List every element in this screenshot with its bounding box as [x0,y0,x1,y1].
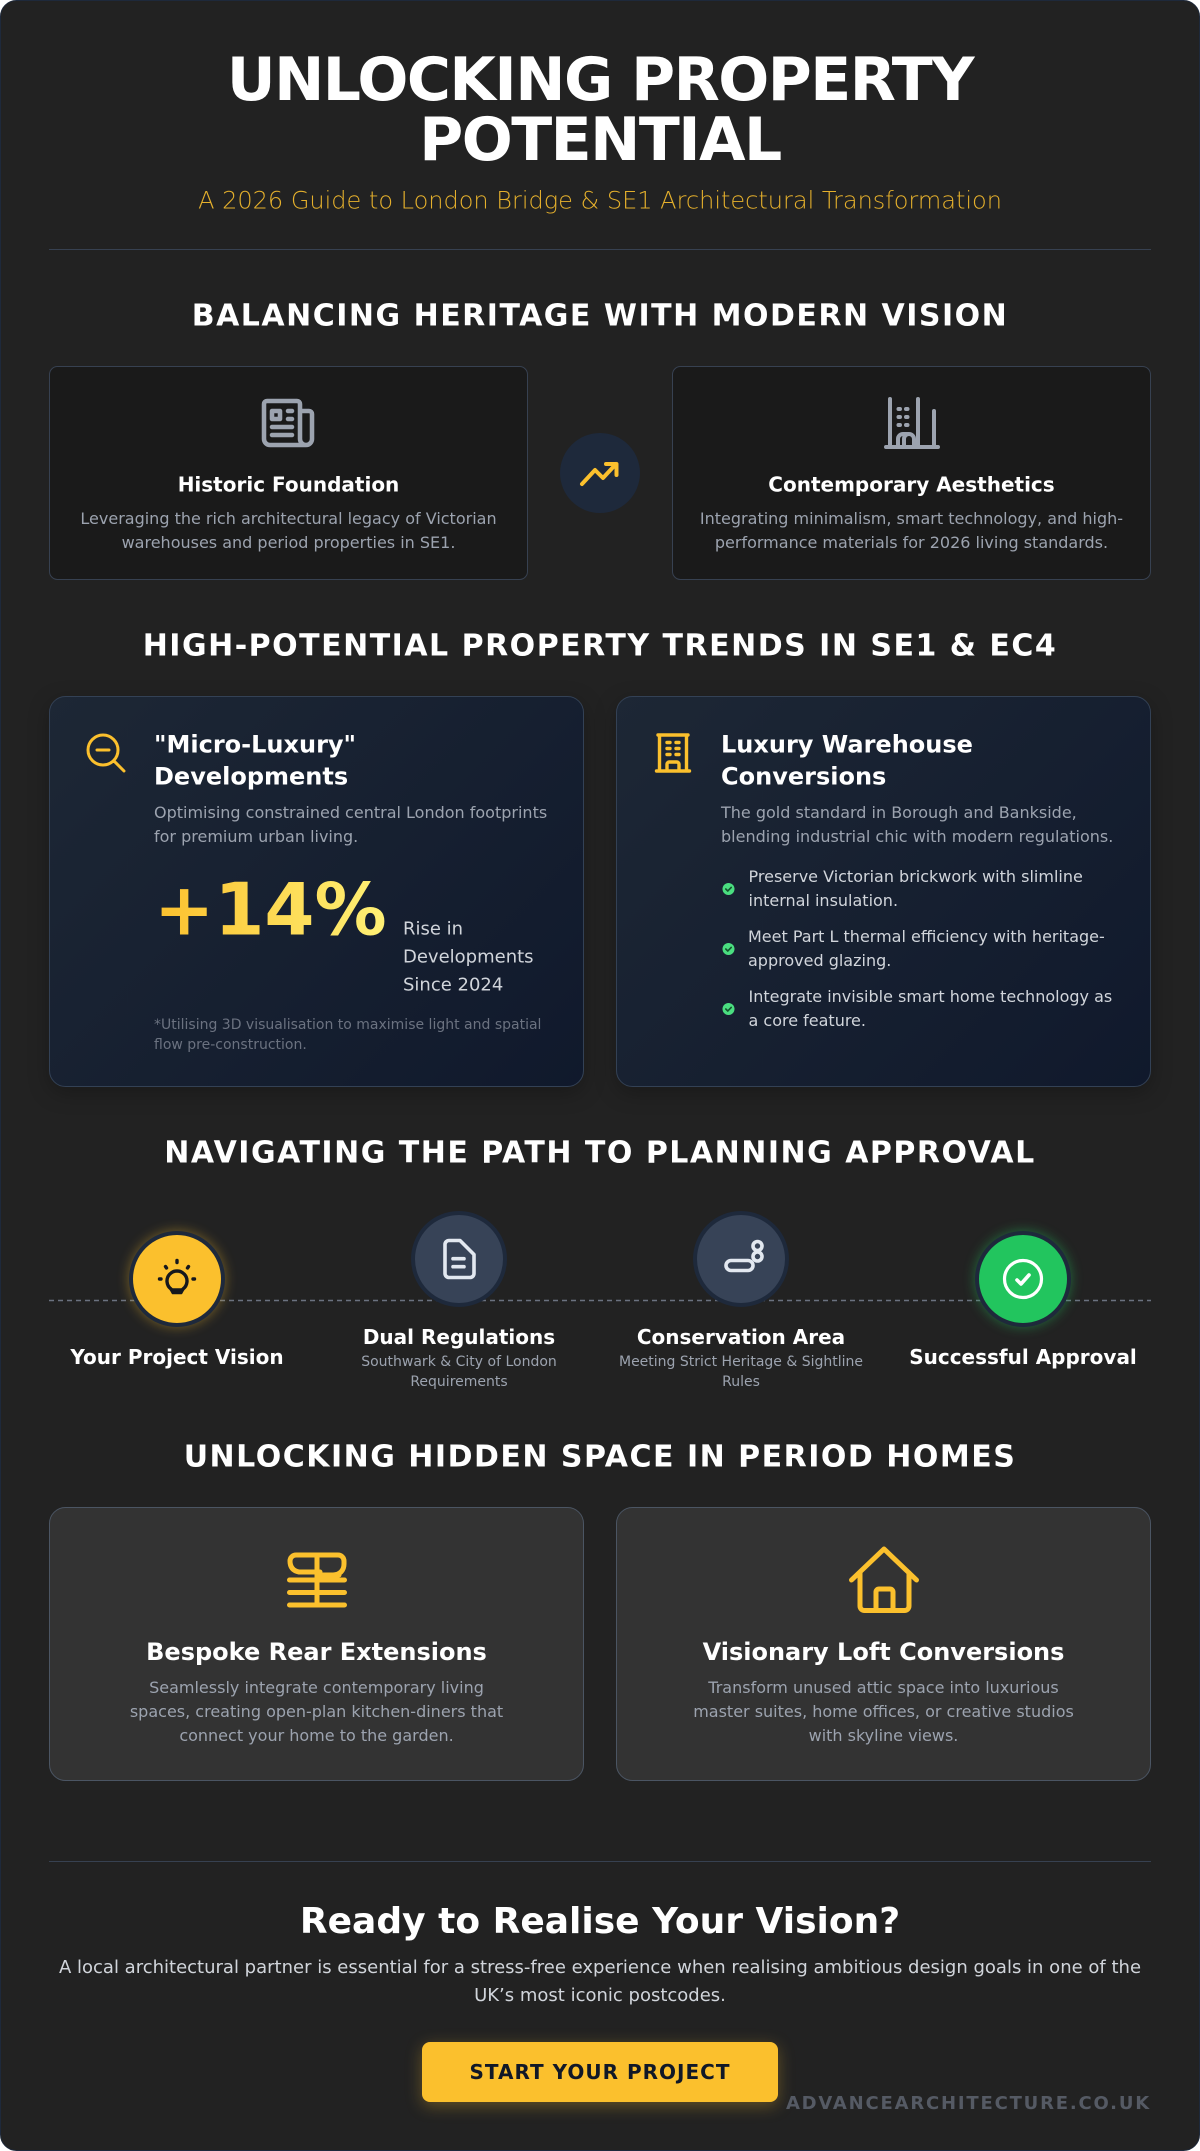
step 2: dual regulations: Requirements [410,1374,508,1390]
bullet 3: Integrate invisible smart home technology as [748,987,1112,1006]
card text: The gold standard in Borough and Bankside, [721,803,1077,822]
section heading: hidden space: UNLOCKING HIDDEN SPACE IN PERIOD HOMES [184,1440,1016,1474]
card title: Visionary Loft Conversions [703,1638,1064,1666]
card text: Seamlessly integrate contemporary living [149,1678,484,1697]
bullet 1: Preserve Victorian brickwork with slimline [748,867,1083,886]
card text: for premium urban living. [154,827,358,846]
step 4: successful approval: Successful Approval [909,1345,1137,1369]
cta heading: Ready to Realise Your Vision? [300,1901,900,1942]
card title: "Micro-Luxury" [154,730,356,758]
title: UNLOCKING PROPERTY [227,45,973,115]
step 3: conservation area: Rules [722,1374,760,1390]
card text: Integrating minimalism, smart technology, and high- [700,509,1123,528]
panel: contemporary aesthetics [672,366,1150,580]
call to action [59,1901,1141,2102]
footnote: *Utilising 3D visualisation to maximise light and spatial [154,1017,541,1033]
step 1: project vision [69,1233,284,1369]
footnote: flow pre-construction. [154,1037,307,1053]
card title: Developments [154,762,348,790]
cta text: UK’s most iconic postcodes. [474,1985,726,2006]
card text: with skyline views. [809,1726,958,1745]
panel: micro-luxury [50,696,584,1086]
card text: Optimising constrained central London footprints [154,803,547,822]
step 2: dual regulations [361,1213,557,1390]
section heading: trends: HIGH-POTENTIAL PROPERTY TRENDS IN SE1 & EC4 [143,628,1057,664]
header [198,45,1002,214]
card text: blending industrial chic with modern regulations. [721,827,1113,846]
card title: Luxury Warehouse [721,730,973,758]
icon: check circle [1004,1260,1042,1298]
icon: office building [656,735,690,771]
panel: rear extensions [50,1508,584,1780]
cta text: A local architectural partner is essential for a stress-free experience when realising ambitious design goals in one of the [59,1957,1141,1978]
section heading: planning: NAVIGATING THE PATH TO PLANNING APPROVAL [164,1136,1036,1170]
step 4: successful approval [909,1233,1137,1369]
bullet 2: Meet Part L thermal efficiency with heritage- [748,927,1105,946]
title: POTENTIAL [419,105,781,175]
card text: spaces, creating open-plan kitchen-diners that [130,1702,503,1721]
bullet 3: a core feature. [748,1011,866,1030]
bullet 1: internal insulation. [748,891,898,910]
bullet 3 [722,987,1112,1030]
card text: Transform unused attic space into luxurious [708,1678,1059,1697]
icon: document [445,1240,474,1278]
footer website: ADVANCEARCHITECTURE.CO.UK [786,2093,1151,2114]
stat label: Developments [403,946,534,968]
step 2: dual regulations: Dual Regulations [363,1325,555,1349]
icon: magnifier [88,735,124,771]
card text: master suites, home offices, or creative studios [693,1702,1074,1721]
section heading: heritage: BALANCING HERITAGE WITH MODERN VISION [192,298,1008,334]
card title: Historic Foundation [178,472,399,496]
icon: contemporary building [886,399,938,447]
button [422,2042,778,2102]
icon: conservation link [726,1242,762,1270]
stat label: Rise in [403,918,463,940]
step 3: conservation area: Meeting Strict Heritage & Sightline [619,1354,863,1370]
card text: connect your home to the garden. [179,1726,454,1745]
icon: trend arrow circle [560,433,640,513]
card title: Conversions [721,762,886,790]
subtitle: A 2026 Guide to London Bridge & SE1 Architectural Transformation [198,186,1002,214]
bullet 1 [722,867,1083,910]
step 1: project vision: Your Project Vision [69,1345,284,1369]
stat label: Since 2024 [403,974,503,996]
card text: Leveraging the rich architectural legacy of Victorian [80,509,497,528]
icon: light bulb [160,1260,194,1294]
panel: loft conversions [616,1508,1150,1780]
icon: newspaper [264,401,312,445]
card text: performance materials for 2026 living standards. [715,533,1108,552]
panel: historic foundation [50,366,528,580]
step 3: conservation area: Conservation Area [637,1325,845,1349]
stat: +14%: +14% [154,868,387,952]
step 2: dual regulations: Southwark & City of London [361,1354,557,1370]
card title: Contemporary Aesthetics [768,472,1055,496]
button: START YOUR PROJECT [470,2060,730,2084]
card title: Bespoke Rear Extensions [146,1638,487,1666]
step 3: conservation area [619,1213,863,1390]
panel: warehouse conversions [616,696,1150,1086]
bullet 2 [722,927,1105,970]
card text: warehouses and period properties in SE1. [122,533,455,552]
icon: rear extension [290,1555,344,1605]
icon: house [852,1549,916,1610]
bullet 2: approved glazing. [748,951,891,970]
